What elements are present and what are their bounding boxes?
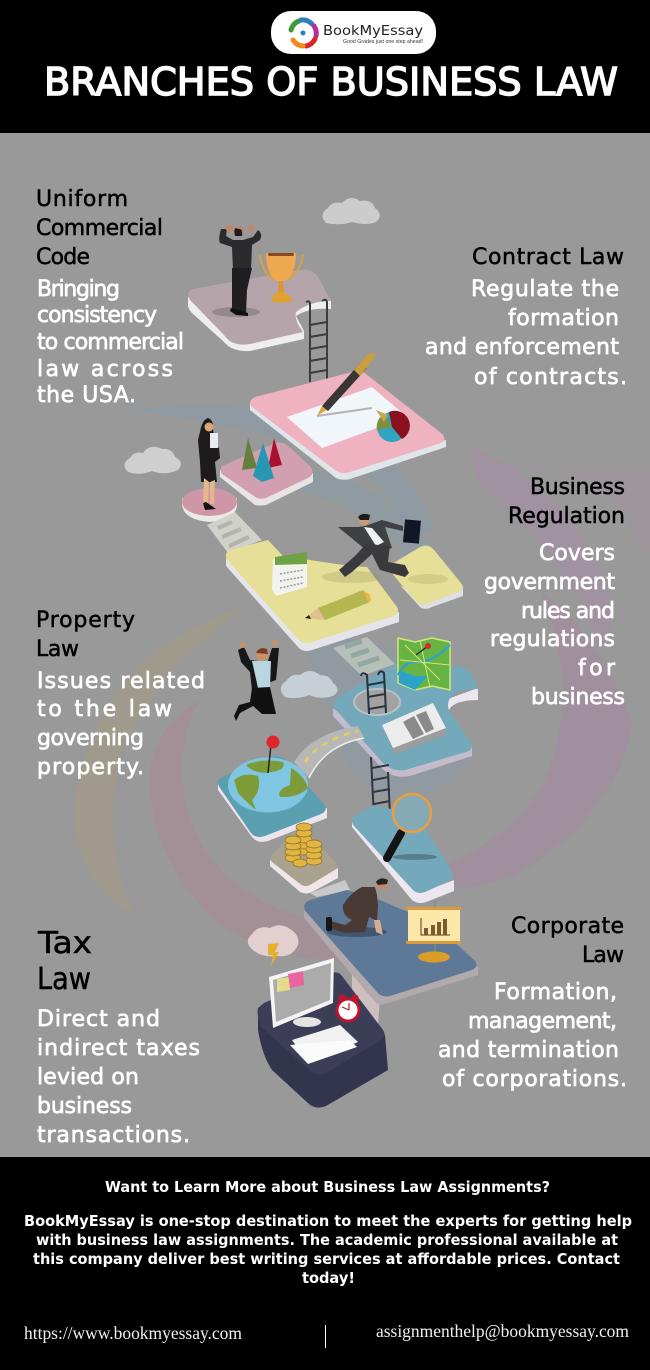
- cloud: middle: [281, 671, 338, 698]
- panel: uniform commercial code text: Uniform: [36, 187, 128, 212]
- icon: presentation board: [406, 900, 461, 962]
- panel: contract law text: and enforcement: [425, 335, 619, 360]
- panel: uniform commercial code text: law across: [37, 357, 173, 382]
- panel: contract law text: Regulate the: [471, 277, 619, 302]
- panel: contract law text: Contract Law: [472, 245, 624, 270]
- panel: corporate law text: Corporate: [511, 914, 624, 939]
- panel: corporate law text: Formation,: [494, 980, 617, 1005]
- panel: tax law text: Direct and: [37, 1007, 160, 1032]
- icon: alarm clock: [337, 994, 359, 1021]
- panel: contract law text: formation: [508, 306, 619, 331]
- stairs: middle: [333, 637, 395, 676]
- platform: blue map: [333, 663, 478, 777]
- footer paragraph: with business law assignments. The academic professional available at: [36, 1231, 618, 1249]
- logo pill: [271, 11, 436, 54]
- footer paragraph: BookMyEssay is one-stop destination to meet the experts for getting help: [24, 1212, 632, 1230]
- background watermark swirl: [74, 405, 650, 961]
- cloud: top: [322, 198, 380, 224]
- cloud: left: [124, 447, 181, 474]
- panel: corporate law text: management,: [468, 1009, 617, 1034]
- panel: property law text: Property: [36, 608, 135, 633]
- panel: business regulation text: regulations: [490, 627, 615, 652]
- platform: small yellow: [387, 546, 463, 609]
- panel: business regulation text: Business: [530, 475, 625, 500]
- panel: tax law text: indirect taxes: [37, 1036, 200, 1061]
- panel: business regulation text: Regulation: [508, 504, 625, 529]
- platform: small pink with pyramids: [220, 442, 313, 506]
- panel: tax law text: transactions.: [37, 1123, 190, 1148]
- panel: uniform commercial code text: consistency: [37, 303, 157, 328]
- panel: business regulation text: business: [531, 685, 625, 710]
- icon: globe with pin: [228, 736, 308, 812]
- platform: large yellow: [226, 540, 399, 651]
- panel: tax law text: business: [37, 1094, 132, 1119]
- platform: coins: [270, 828, 338, 894]
- icon: pencil: [305, 590, 371, 620]
- divider: [325, 1325, 326, 1348]
- stairs: upper: [207, 512, 262, 553]
- figure: crouching businessman: [326, 878, 388, 935]
- ladder: middle: [361, 671, 386, 714]
- logo wordmark: BookMyEssay: [323, 24, 423, 39]
- pillar under platform: [352, 968, 380, 1024]
- logo tagline: Good Grades just one step ahead!: [343, 39, 423, 45]
- panel: tax law text: levied on: [37, 1065, 139, 1090]
- footer paragraph: today!: [302, 1269, 355, 1287]
- icon: computer monitor: [269, 958, 334, 1028]
- footer paragraph: [24, 1212, 632, 1287]
- figure: businessman flexing: [219, 224, 261, 316]
- icon: coin stacks: [285, 823, 322, 867]
- website url: https://www.bookmyessay.com: [24, 1323, 242, 1343]
- icon: pie chart: [376, 410, 410, 442]
- footer heading: Want to Learn More about Business Law Assignments?: [105, 1178, 550, 1196]
- icon: logo swirl: [291, 20, 316, 46]
- ladder: lower: [371, 757, 390, 818]
- email address: assignmenthelp@bookmyessay.com: [376, 1321, 629, 1341]
- icon: book: [382, 703, 446, 755]
- panel: property law text: [36, 608, 205, 780]
- icon: papers: [290, 1025, 358, 1064]
- panel: uniform commercial code text: Code: [36, 245, 90, 270]
- cloud: thought with lightning: [248, 925, 298, 966]
- panel: uniform commercial code text: Bringing: [37, 277, 120, 302]
- platform: pink contract: [250, 371, 446, 480]
- hole in platform: [354, 689, 400, 715]
- icon: paper: [287, 387, 407, 448]
- panel: business regulation text: government: [484, 570, 615, 595]
- panel: contract law text: [425, 245, 627, 390]
- footer paragraph: this company deliver best writing services at affordable prices. Contact: [33, 1250, 620, 1268]
- icon: calendar: [272, 552, 307, 596]
- desk: [258, 972, 388, 1108]
- panel: contract law text: of contracts.: [474, 365, 627, 390]
- platform: corporate navy: [304, 890, 478, 1004]
- header band: [0, 0, 650, 133]
- platform: mauve trophy: [188, 270, 331, 351]
- icon: trophy: [260, 253, 303, 302]
- title: BRANCHES OF BUSINESS LAW: [44, 60, 618, 104]
- footer band: [0, 1157, 650, 1370]
- panel: property law text: governing: [37, 726, 144, 751]
- panel: corporate law text: and termination: [438, 1038, 619, 1063]
- panel: uniform commercial code text: Commercial: [36, 216, 163, 241]
- icon: magnifying glass: [387, 794, 431, 858]
- icon: fountain pen: [317, 353, 376, 416]
- platform: round pad: [182, 488, 237, 522]
- figure: businesswoman: [198, 418, 220, 510]
- icon: pyramids: [242, 438, 282, 482]
- panel: uniform commercial code text: the USA.: [37, 383, 136, 408]
- panel: tax law text: Law: [37, 962, 91, 997]
- panel: property law text: Law: [36, 637, 79, 662]
- panel: uniform commercial code text: [36, 187, 184, 408]
- panel: property law text: Issues related: [37, 669, 205, 694]
- figure: running businessman: [338, 514, 421, 577]
- panel: property law text: to the law: [37, 697, 172, 722]
- panel: uniform commercial code text: to commercial: [37, 330, 184, 355]
- panel: corporate law text: of corporations.: [442, 1067, 627, 1092]
- icon: map: [398, 638, 450, 690]
- stairs: lower: [310, 880, 350, 897]
- panel: business regulation text: Covers: [539, 541, 615, 566]
- panel: corporate law text: Law: [582, 943, 624, 968]
- panel: tax law text: Tax: [37, 926, 92, 961]
- panel: tax law text: [37, 926, 200, 1148]
- illustration: isometric path: [124, 198, 478, 1108]
- figure: jumping businessman: [234, 640, 279, 721]
- panel: business regulation text: [484, 475, 625, 710]
- platform: globe: [218, 756, 327, 842]
- panel: property law text: property.: [37, 755, 144, 780]
- platform: blue magnifier: [352, 805, 454, 903]
- road: [294, 726, 364, 778]
- panel: corporate law text: [438, 914, 627, 1092]
- panel: business regulation text: rules and: [521, 599, 615, 624]
- panel: business regulation text: for: [578, 656, 616, 681]
- ladder: top: [306, 300, 327, 382]
